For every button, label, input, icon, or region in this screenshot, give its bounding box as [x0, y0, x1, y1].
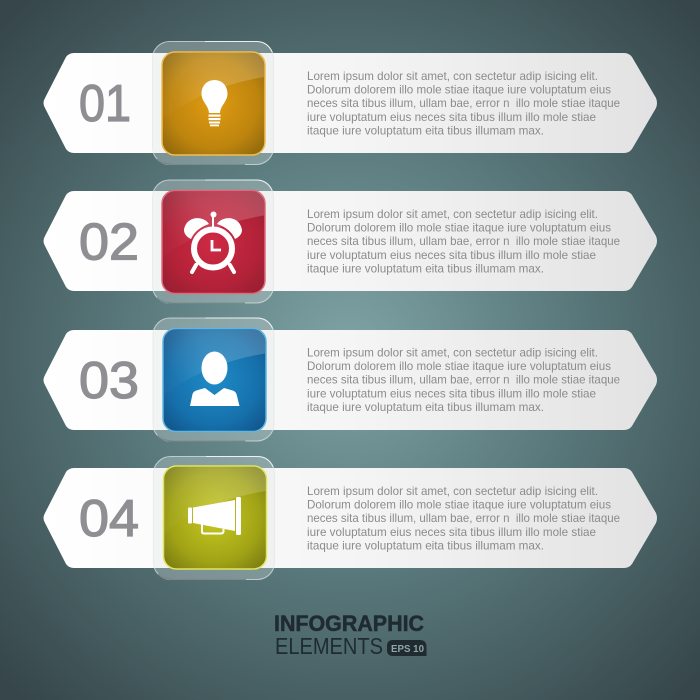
text block 01: Lorem ipsum dolor sit amet, con sectetur adip isicing elit.	[307, 69, 598, 83]
number 03: 03	[79, 352, 139, 410]
text block 01: Dolorum dolorem illo mole stiae itaque iure voluptatum eius	[307, 82, 611, 96]
banner 01	[44, 53, 657, 153]
row 01	[44, 42, 657, 164]
row 02	[44, 180, 657, 303]
colour tile 01	[162, 52, 265, 155]
text block 03: Lorem ipsum dolor sit amet, con sectetur adip isicing elit.	[307, 346, 598, 360]
icon: light bulb	[202, 80, 228, 126]
text block 03	[307, 346, 620, 414]
text block 02: itaque iure voluptatum eita tibus illumam max.	[307, 262, 544, 276]
colour tile 03	[163, 328, 266, 432]
text block 04: itaque iure voluptatum eita tibus illumam max.	[307, 538, 544, 552]
text block 01	[307, 69, 620, 138]
icon: megaphone	[188, 497, 241, 535]
colour tile 02	[162, 190, 265, 294]
banner 02	[44, 191, 657, 291]
text block 04: iure voluptatum eius neces sita tibus illum illo mole stiae	[307, 525, 596, 539]
icon: alarm clock	[184, 212, 242, 272]
row 04	[44, 456, 657, 580]
text block 04	[307, 484, 620, 552]
number 01: 01	[79, 75, 131, 133]
text block 04: Lorem ipsum dolor sit amet, con sectetur adip isicing elit.	[307, 484, 598, 498]
text block 03: itaque iure voluptatum eita tibus illumam max.	[307, 400, 544, 414]
colour tile 04	[164, 466, 266, 569]
text block 02: Lorem ipsum dolor sit amet, con sectetur adip isicing elit.	[307, 207, 598, 221]
banner 03	[44, 330, 657, 430]
badge: eps 10: EPS 10	[391, 643, 424, 655]
text block 03: neces sita tibus illum, ullam bae, error n illo mole stiae itaque	[307, 372, 620, 386]
text block 02: Dolorum dolorem illo mole stiae itaque iure voluptatum eius	[307, 220, 611, 234]
text block 04: neces sita tibus illum, ullam bae, error n illo mole stiae itaque	[307, 511, 620, 525]
text block 02: iure voluptatum eius neces sita tibus illum illo mole stiae	[307, 248, 596, 262]
glass frame 04	[154, 456, 274, 580]
glass frame 02	[152, 180, 274, 303]
banner 04	[44, 468, 657, 568]
text block 04: Dolorum dolorem illo mole stiae itaque iure voluptatum eius	[307, 498, 611, 512]
icon: person	[190, 352, 240, 406]
row 03	[44, 318, 657, 441]
text block 03: Dolorum dolorem illo mole stiae itaque iure voluptatum eius	[307, 359, 611, 373]
text block 01: itaque iure voluptatum eita tibus illumam max.	[307, 124, 544, 138]
tile shine 03	[164, 330, 265, 394]
badge: eps 10	[387, 640, 426, 656]
title	[274, 611, 426, 659]
glass frame 03	[153, 318, 274, 441]
text block 01: neces sita tibus illum, ullam bae, error n illo mole stiae itaque	[307, 96, 620, 110]
tile shine 02	[163, 192, 264, 256]
tile shine 04	[164, 467, 266, 532]
tile shine 01	[163, 53, 264, 118]
title line: infographic: INFOGRAPHIC	[274, 611, 424, 636]
text block 02: neces sita tibus illum, ullam bae, error n illo mole stiae itaque	[307, 234, 620, 248]
text block 03: iure voluptatum eius neces sita tibus illum illo mole stiae	[307, 386, 596, 400]
number 04: 04	[79, 490, 139, 548]
text block 01: iure voluptatum eius neces sita tibus illum illo mole stiae	[307, 110, 596, 124]
glass frame 01	[152, 42, 274, 164]
text block 02	[307, 207, 620, 276]
title line: elements: ELEMENTS	[275, 633, 383, 659]
number 02: 02	[79, 214, 139, 272]
